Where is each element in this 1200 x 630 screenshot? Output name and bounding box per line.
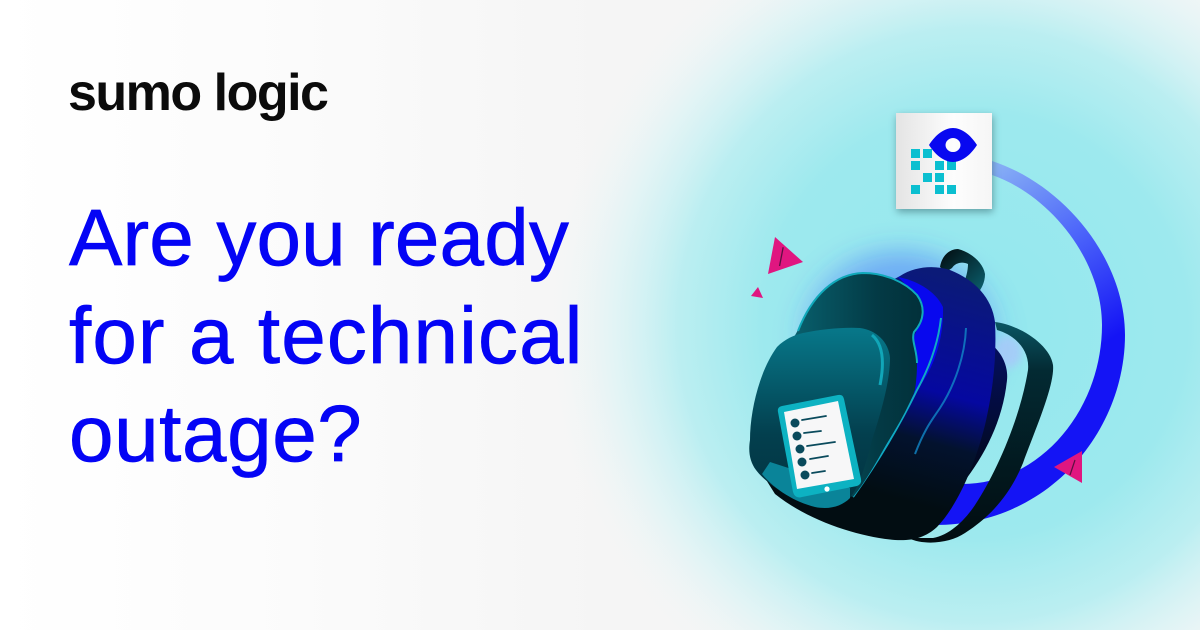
backpack [749, 247, 1053, 543]
inner back strap [940, 343, 1007, 500]
headline: Are you ready [69, 193, 569, 282]
headline: for a technical [69, 291, 584, 380]
background glow [500, 0, 1200, 630]
icon: warning triangle on arc [1054, 451, 1082, 483]
logo: sumo logic [68, 64, 327, 122]
backpack main body [760, 267, 995, 540]
card: eye over data squares [896, 113, 993, 212]
headline [68, 193, 584, 478]
upper compartment [770, 273, 923, 497]
icon: warning triangles [751, 237, 803, 298]
tablet [778, 395, 861, 497]
backpack handle [940, 249, 985, 293]
icon: eye [929, 128, 977, 162]
front pocket [749, 328, 890, 506]
arc arrow ring [935, 161, 1125, 525]
blue zip stripe [898, 277, 943, 400]
headline: outage? [69, 389, 362, 478]
outer back strap [908, 322, 1053, 543]
